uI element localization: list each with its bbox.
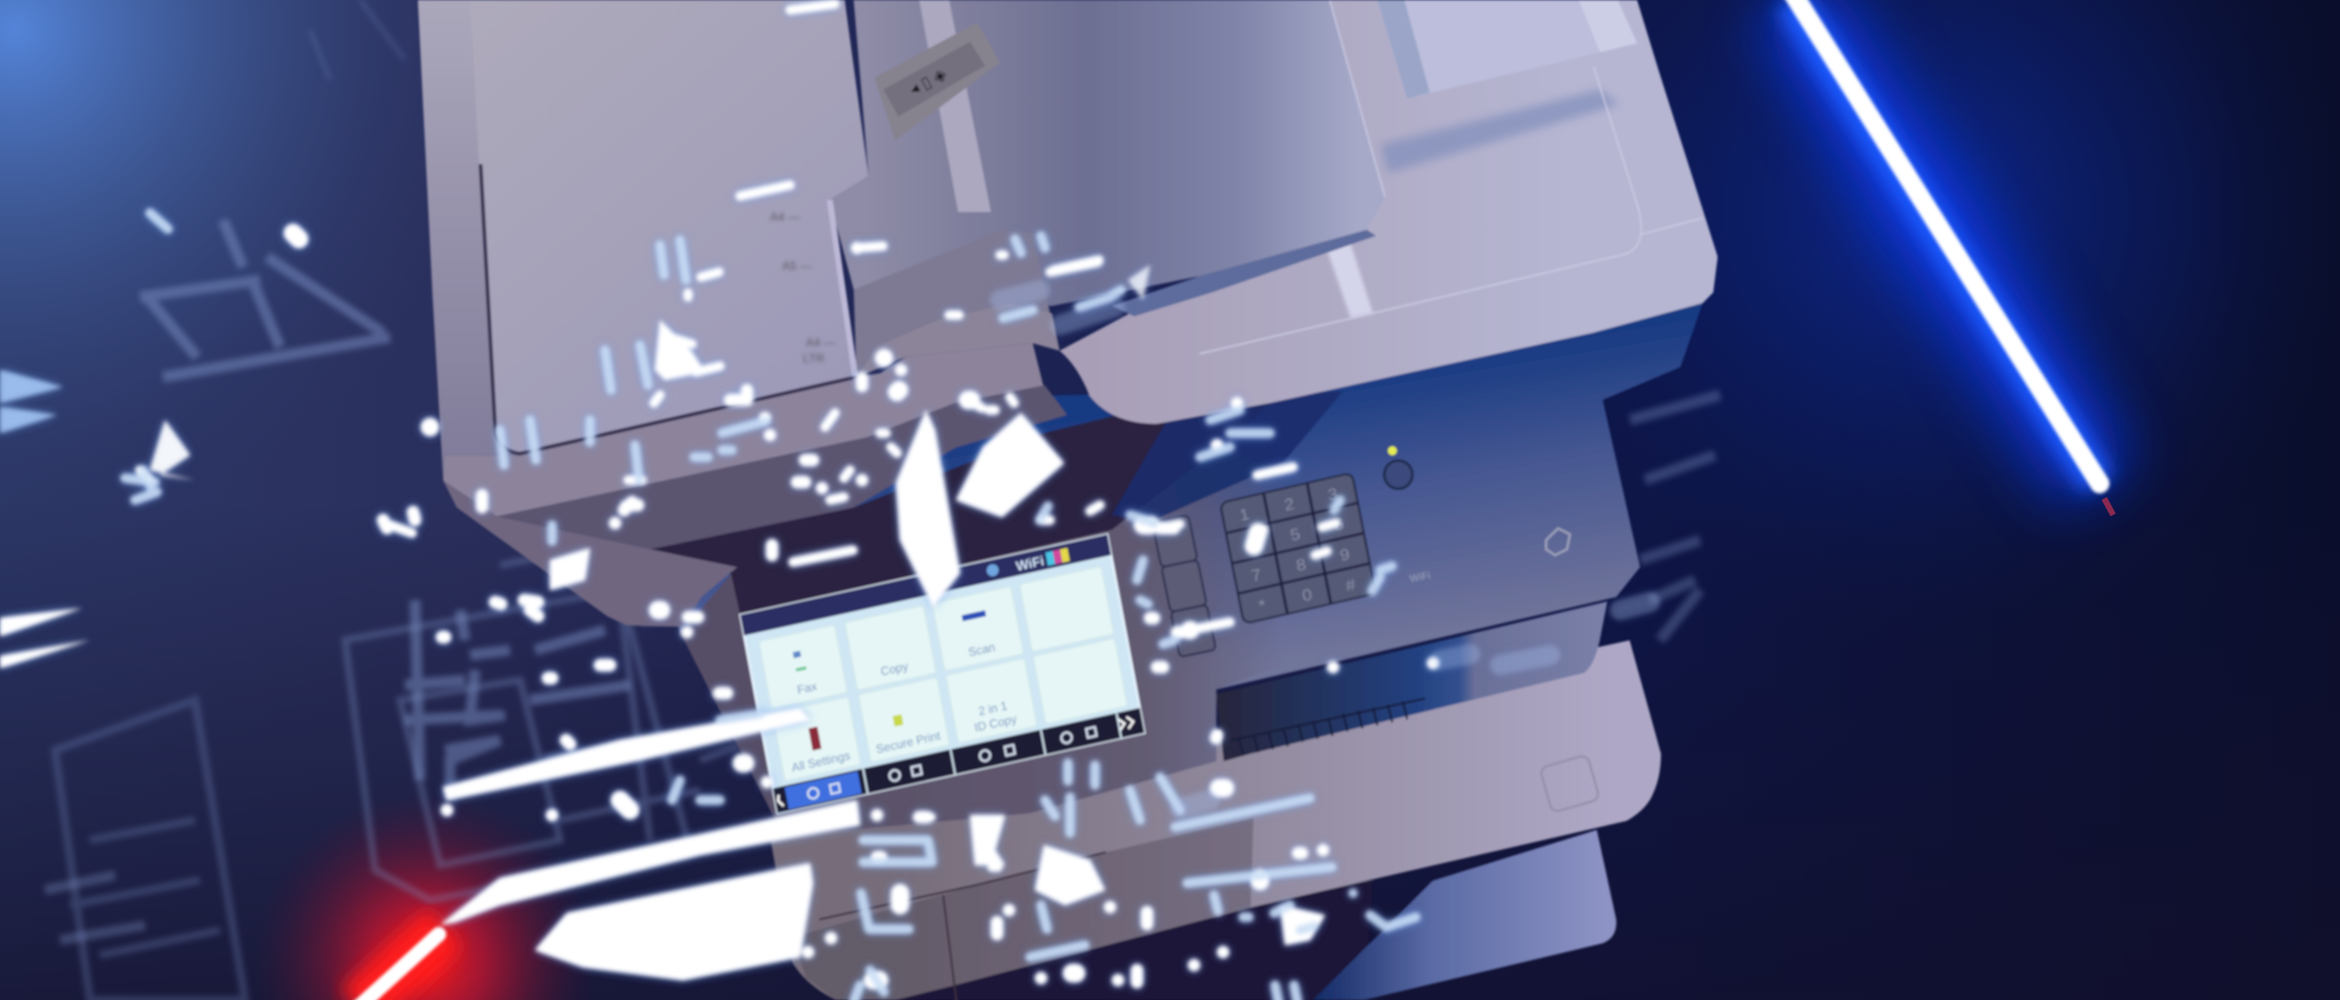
vertical feeder guide strip (919, 0, 991, 212)
control keypad: 0 (1301, 585, 1314, 605)
faint hazy blotches (1000, 290, 1650, 808)
white dashes (140, 4, 1336, 867)
control keypad: 4 (1244, 535, 1257, 555)
control keypad: 6 (1332, 515, 1345, 535)
paper size marks: A4 — (806, 335, 836, 349)
blue neon light bar (1791, 0, 2113, 515)
white shard (896, 410, 960, 607)
central document tray (830, 0, 1385, 306)
feeder slide handle (875, 22, 1000, 140)
control keypad: 5 (1289, 525, 1302, 545)
white blobs (293, 233, 1260, 980)
paper size marks: LTR (803, 352, 825, 366)
shadow under tray (1112, 230, 1376, 316)
dark under-printer base (836, 881, 1373, 1000)
screen tile labels (777, 638, 1018, 775)
printer left housing column (418, 0, 516, 481)
dark recess above screen (651, 391, 1283, 615)
screen tiles (759, 566, 1127, 781)
tray edge highlight (830, 200, 855, 376)
printer (418, 0, 1718, 1000)
control keypad: 2 (1283, 494, 1296, 514)
paper output slot (1216, 601, 1607, 761)
cassette square badge (1540, 755, 1600, 813)
feeder arm (854, 230, 1052, 378)
printer lowest paper tray (1313, 830, 1616, 1000)
handle icons: ◂ ▯ ◈ (907, 65, 950, 99)
printer right top housing (1060, 0, 1718, 424)
blue interior above keypad (1112, 391, 1343, 522)
wide white streak (440, 800, 860, 925)
cassette groove (819, 852, 1106, 1000)
screen tile labels: Scan (967, 640, 996, 659)
red neon light bar (358, 928, 445, 1000)
left faint spikes (0, 370, 63, 433)
left white streaks (0, 608, 90, 668)
home and back buttons (1152, 515, 1216, 657)
screen status bar (740, 534, 1111, 636)
screen status bar: WiFi (1015, 553, 1045, 574)
white block (535, 863, 813, 980)
control keypad: 9 (1338, 545, 1351, 565)
control keypad: 1 (1238, 505, 1251, 525)
control keypad: # (1344, 575, 1358, 595)
control keypad (1220, 473, 1376, 624)
recess shadow (1380, 90, 1619, 173)
left document tray (470, 0, 869, 455)
panel left grey tone (681, 448, 1283, 836)
control keypad: 8 (1295, 555, 1308, 575)
feeder arm lower lip (857, 303, 1060, 378)
screen tile labels: ID Copy (973, 712, 1018, 735)
printer lower cassette (769, 640, 1661, 1000)
paper size marks: A5 — (782, 259, 812, 273)
housing light front strip (443, 343, 1045, 516)
blueprint ghost structures (45, 0, 1720, 1000)
white angled block (956, 413, 1064, 517)
cassette lower shading (792, 818, 1254, 1000)
screen tile labels: Copy (880, 659, 909, 679)
screen tile labels: Secure Print (875, 728, 942, 756)
reflection stripe (1327, 243, 1373, 318)
screen tile labels: Fax (796, 679, 818, 697)
tray dark gap and edge (481, 164, 854, 454)
long white streak across screen (443, 708, 810, 800)
screen tile labels: All Settings (790, 748, 851, 775)
control keypad: 3 (1326, 484, 1339, 504)
printer control panel housing (651, 303, 1703, 836)
particle clusters (150, 265, 1325, 945)
particles, streaks and shards (0, 4, 1650, 1000)
housing dark front band (497, 385, 1067, 549)
screen tile icons (793, 610, 1003, 751)
wifi label: WiFi (1409, 571, 1431, 585)
recess right highlight (1579, 0, 1637, 52)
translucent blueprint fragments (125, 213, 1416, 1000)
screen bottom bar (773, 708, 1145, 813)
recess left wall (1377, 0, 1430, 99)
NFC mark (1546, 528, 1570, 555)
screen tile labels: 2 in 1 (977, 698, 1009, 719)
paper size marks: A4 — (770, 210, 800, 224)
control keypad: * (1257, 596, 1268, 615)
scanner recess (1377, 0, 1637, 99)
control keypad: 7 (1250, 565, 1263, 585)
touch screen (740, 534, 1145, 813)
housing lower-left corner (443, 481, 737, 627)
paper size marks (770, 210, 836, 366)
slot ribs (1231, 699, 1425, 755)
power button and yellow LED (1384, 446, 1413, 489)
